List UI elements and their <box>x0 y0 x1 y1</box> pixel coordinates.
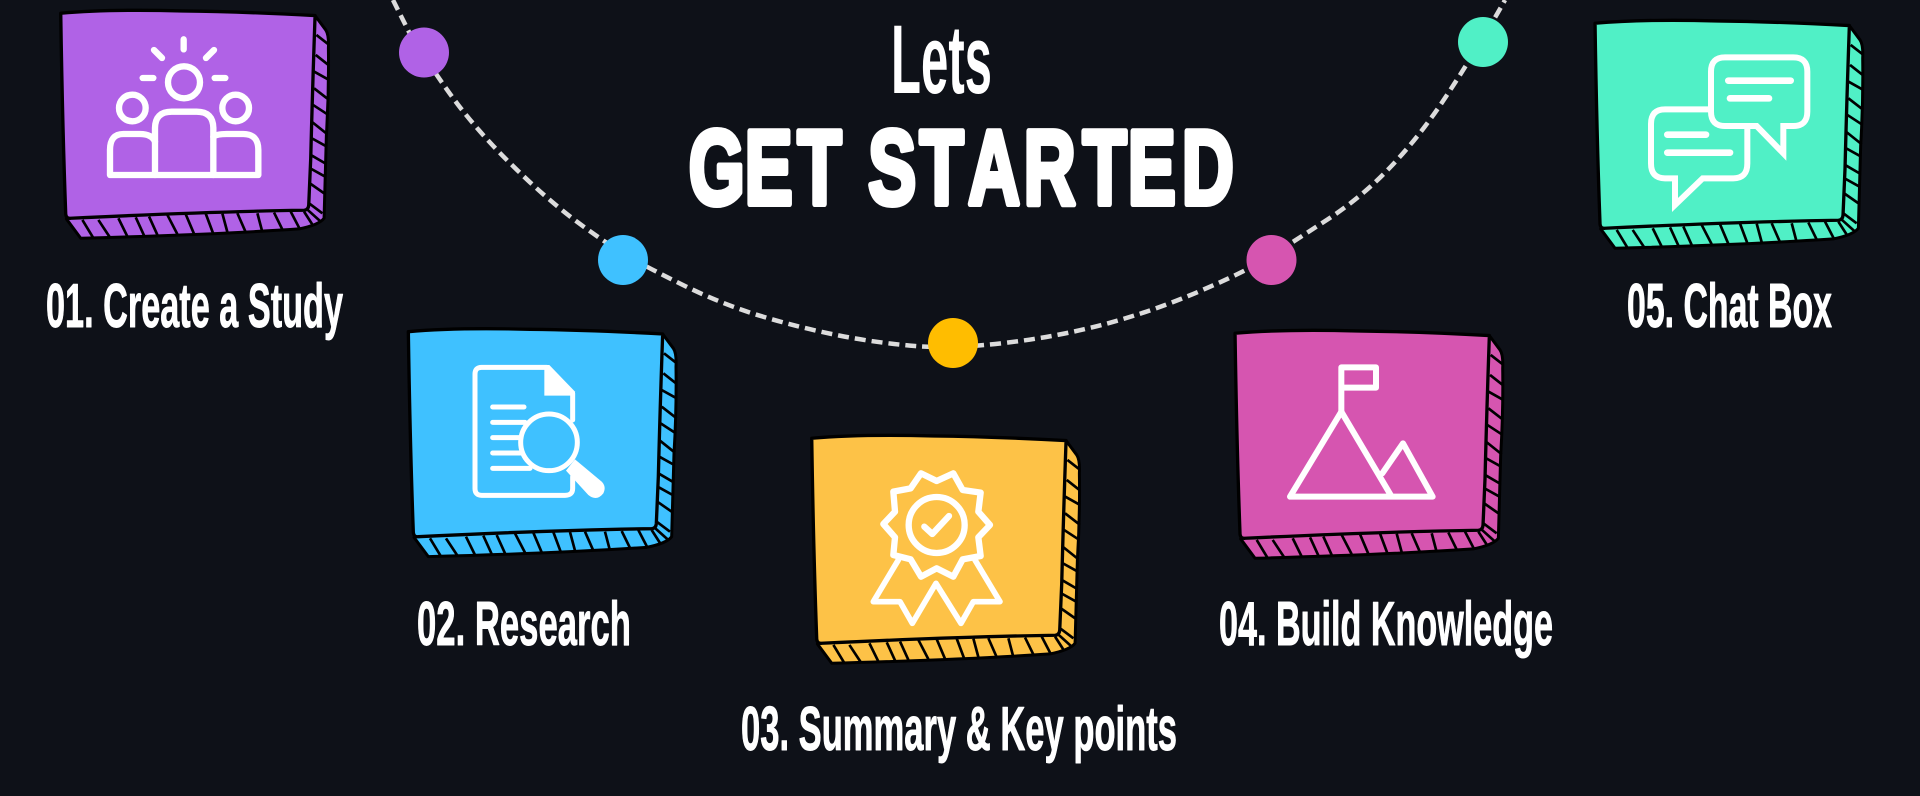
icon: award rosette <box>873 473 1000 623</box>
card: yellow <box>812 435 1080 663</box>
node: teal <box>1458 17 1508 67</box>
label: 03: 03. Summary & Key points <box>741 695 1177 764</box>
label: 02: 02. Research <box>417 590 631 659</box>
card: blue <box>408 329 677 557</box>
label: 01: 01. Create a Study <box>46 272 343 341</box>
dashed connector curve <box>393 0 1505 347</box>
node: yellow <box>928 318 978 368</box>
title line: GET STARTED: GET STARTED <box>689 109 1234 227</box>
step 3 panel: Summary and Key points <box>741 435 1177 764</box>
title <box>689 5 1234 227</box>
step 1 panel: Create a Study <box>46 10 343 341</box>
step 4 panel: Build Knowledge <box>1219 330 1553 659</box>
card: pink <box>1235 330 1503 558</box>
card: teal <box>1595 20 1863 248</box>
icon: document with magnifier <box>475 365 605 498</box>
label: 04: 04. Build Knowledge <box>1219 590 1553 659</box>
icon: mountain with flag <box>1290 367 1433 497</box>
node: pink <box>1246 235 1296 285</box>
step 2 panel: Research <box>408 329 677 659</box>
icon: team with idea <box>110 39 258 175</box>
icon: chat bubbles <box>1651 57 1807 205</box>
step 5 panel: Chat Box <box>1595 20 1863 341</box>
node: purple <box>399 28 449 78</box>
node: blue <box>598 235 648 285</box>
card: purple <box>61 10 329 238</box>
title line: Lets: Lets <box>891 5 992 114</box>
